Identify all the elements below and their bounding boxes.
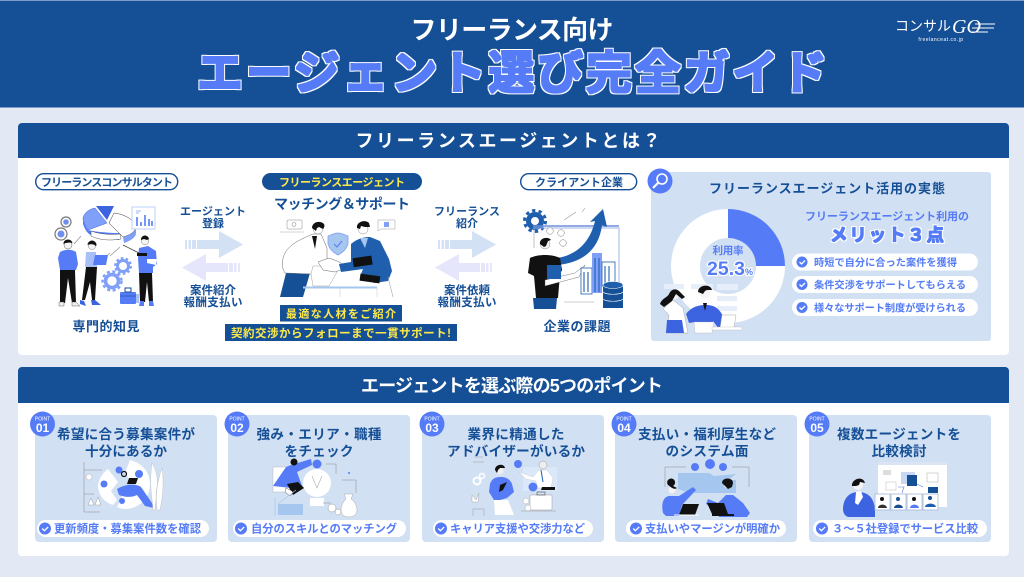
icon: magnifier (648, 168, 672, 194)
badge 04 (612, 412, 636, 436)
badge 02: 02 (230, 421, 244, 435)
label: referral and payment: 案件紹介 (190, 283, 236, 297)
badge 03: 03 (425, 421, 439, 435)
section heading bar: エージェントを選ぶ際の5つのポイント (361, 375, 663, 396)
badge 02 (224, 412, 250, 436)
illustration: handshake (280, 220, 395, 297)
label: freelance referral: フリーランス (434, 205, 500, 218)
label: request and payment: 報酬支払い (438, 295, 496, 309)
arrow: to agent (185, 231, 243, 258)
heading: matching and support: マッチング＆サポート (274, 196, 410, 212)
badge 05 (804, 412, 830, 436)
logo: GO (952, 16, 981, 38)
card heading (256, 426, 382, 459)
logo (895, 16, 995, 43)
card heading: のシステム面 (666, 444, 748, 459)
note pill: 支払いやマージンが明確か (645, 522, 781, 536)
donut chart 25.3% (686, 209, 785, 308)
illustration: pie and laptop (84, 460, 163, 512)
merit 1 (792, 254, 978, 270)
card heading (447, 426, 585, 459)
note pill: キャリア支援や交渉力など (450, 522, 586, 536)
label: client company: クライアント企業 (535, 175, 623, 189)
card heading (837, 426, 961, 459)
badge 01: POINT (35, 416, 50, 422)
label: freelance agent: フリーランスエージェント (279, 176, 405, 189)
card heading: アドバイザーがいるか (447, 443, 585, 459)
callout: best talent (280, 305, 402, 322)
merit 1: 時短で自分に合った案件を獲得 (814, 256, 957, 269)
note pill: ３～５社登録でサービス比較 (832, 522, 979, 536)
label: agent registration: エージェント (180, 205, 246, 218)
card heading: 比較検討 (872, 443, 927, 459)
note pill (813, 520, 987, 537)
badge 05: POINT (809, 416, 825, 422)
illustration: two people and laptop (660, 284, 742, 333)
card heading: 十分にあるか (85, 443, 167, 459)
donut chart 25.3%: 25.3% (707, 258, 753, 280)
card: point 02 (224, 412, 410, 542)
donut chart 25.3%: 利用率 (712, 244, 744, 257)
badge 03 (420, 412, 444, 436)
illustration: consultants with pie chart (55, 206, 157, 306)
card: point 01 (30, 412, 217, 542)
card: point 04 (612, 412, 797, 542)
label: freelance referral: 紹介 (456, 216, 478, 230)
badge 04: POINT (616, 416, 632, 422)
label: agent registration (180, 205, 246, 230)
card heading: 複数エージェントを (837, 426, 961, 442)
caption: corporate challenges: 企業の課題 (544, 319, 610, 334)
section heading bar (18, 123, 1009, 158)
main title: エージェント選び完全ガイド (197, 47, 827, 99)
card: point 05 (804, 412, 991, 542)
label: referral and payment: 報酬支払い (184, 295, 242, 309)
callout: best talent: 最適な人材をご紹介 (286, 306, 396, 320)
illustration: comparing profiles (843, 462, 947, 517)
badge 03: POINT (424, 416, 440, 422)
header band (0, 0, 1024, 108)
arrow: to client (438, 231, 496, 258)
card heading (638, 426, 776, 459)
label: freelance agent (262, 173, 422, 190)
title line 1: フリーランス向け (410, 15, 614, 45)
card heading: 強み・エリア・職種 (256, 426, 382, 442)
card: point 03 (420, 412, 604, 542)
badge 02: POINT (229, 416, 245, 422)
merit subheading: フリーランスエージェント利用の (805, 209, 969, 223)
merit 3 (792, 299, 978, 316)
illustration: idea bulb and person (273, 458, 357, 517)
panel heading: フリーランスエージェント活用の実態 (709, 181, 945, 196)
panel: usage of freelance agents (648, 168, 991, 341)
note pill (37, 520, 209, 537)
label: agent registration: 登録 (202, 216, 224, 230)
badge 01: 01 (36, 421, 49, 435)
merit 2: 条件交渉をサポートしてもらえる (814, 278, 966, 292)
section heading bar: フリーランスエージェントとは？ (356, 131, 660, 151)
callout: consistent support: 契約交渉からフォローまで一貫サポート! (231, 326, 451, 340)
card heading: 業界に精通した (468, 426, 564, 442)
note pill (626, 520, 786, 537)
callout: consistent support (225, 324, 457, 341)
note pill (433, 520, 593, 537)
merit 2 (792, 276, 978, 293)
logo: コンサル (895, 18, 951, 34)
badge 05: 05 (810, 421, 824, 435)
note pill: 更新頻度・募集案件数を確認 (54, 522, 202, 536)
note pill: 自分のスキルとのマッチング (251, 522, 398, 536)
note pill (233, 520, 406, 537)
illustration: two people with laptops (662, 459, 750, 517)
arrow: from agent (182, 254, 240, 281)
label: referral and payment (184, 283, 242, 309)
badge 04: 04 (617, 421, 631, 435)
merit list (792, 254, 978, 316)
card heading (57, 426, 195, 459)
illustration: adviser meeting (472, 457, 557, 516)
badge 01 (30, 412, 55, 436)
label: client company (521, 174, 637, 190)
card heading: 希望に合う募集案件が (57, 426, 195, 442)
merit heading: メリット３点 (830, 225, 944, 245)
label: freelance referral (434, 205, 500, 230)
arrow: from client (435, 254, 492, 281)
logo: freelanceat.co.jp (918, 37, 964, 43)
panel: five points (18, 367, 1009, 556)
merit 3: 様々なサポート制度が受けられる (814, 302, 966, 314)
label: consultant: フリーランスコンサルタント (41, 176, 173, 189)
section heading bar (18, 367, 1009, 403)
card heading: 支払い・福利厚生など (638, 426, 776, 442)
caption: expertise: 専門的知見 (72, 319, 140, 334)
label: consultant (36, 174, 178, 190)
label: request and payment: 案件依頼 (444, 283, 490, 297)
illustration: client growth chart (524, 208, 623, 309)
card heading: をチェック (284, 444, 354, 459)
label: request and payment (438, 283, 496, 309)
panel: what is a freelance agent (18, 123, 1009, 355)
